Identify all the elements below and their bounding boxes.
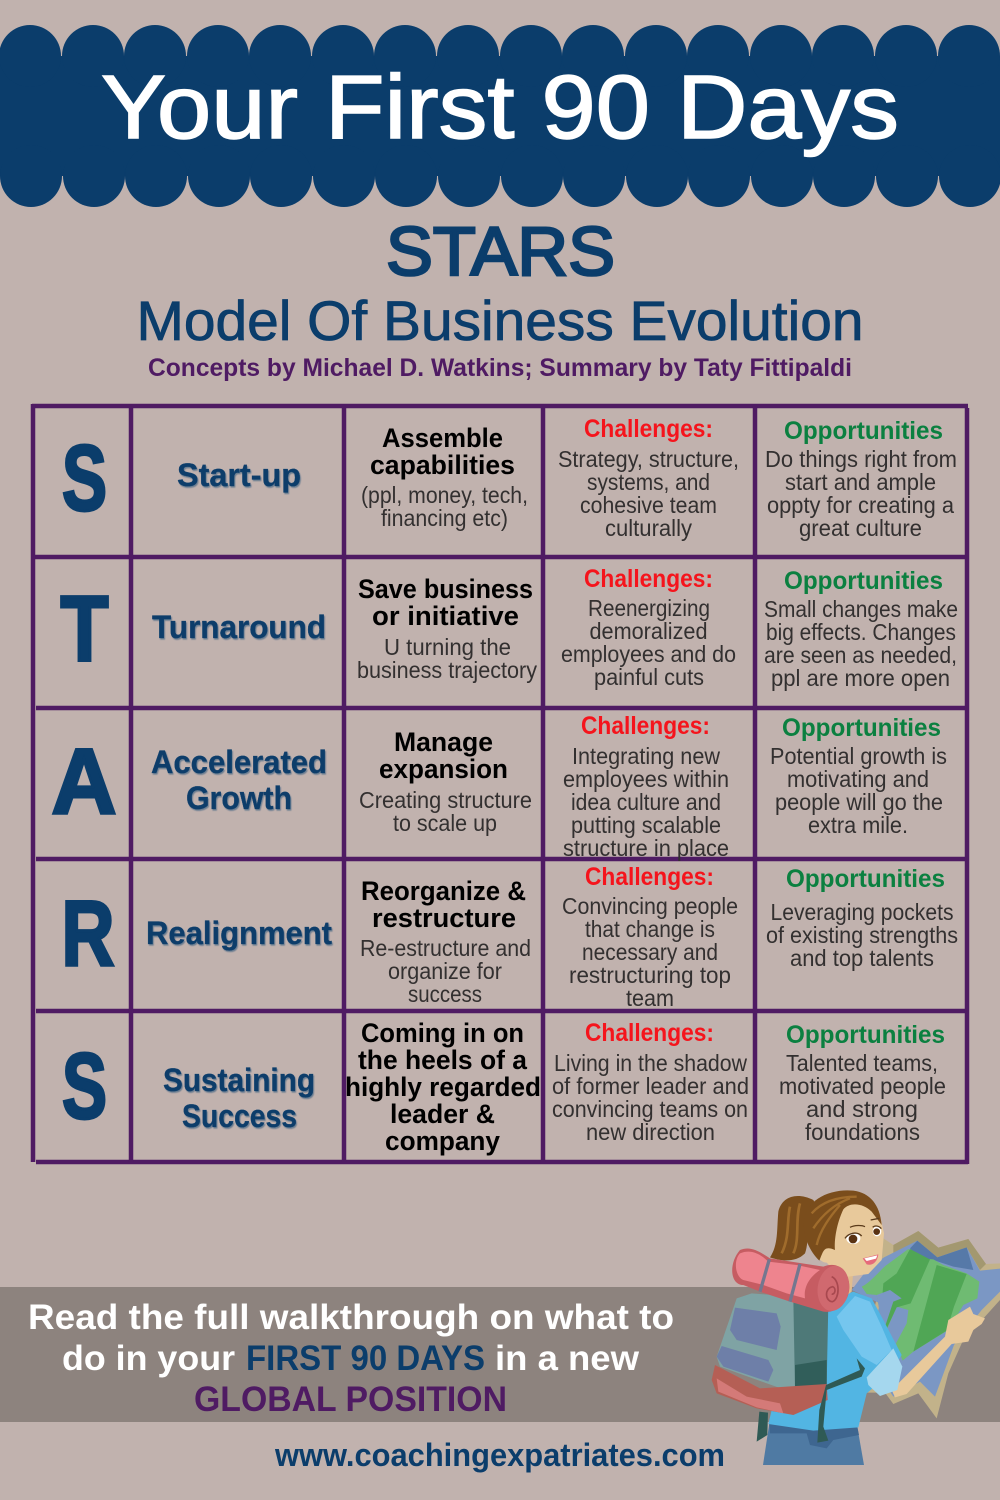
row: Turnaround: Challenges: [584, 565, 713, 593]
row: Accelerated Growth: Potential growth is [770, 743, 947, 769]
row: Realignment: Leveraging pockets [770, 899, 954, 925]
row: Realignment: Challenges: [585, 863, 714, 891]
row: Sustaining Success: Coming in on [361, 1018, 524, 1048]
row: Turnaround: Reenergizing [588, 595, 710, 621]
row: Realignment: restructuring top [569, 962, 731, 988]
neck [830, 1260, 853, 1303]
row: Sustaining Success: Talented teams, [786, 1050, 938, 1076]
head and hair [804, 1190, 884, 1277]
row: Realignment: Re-estructure and [360, 935, 531, 961]
row: Accelerated Growth: Accelerated [151, 744, 327, 780]
row: Start-up: S [62, 426, 107, 530]
title banner with scalloped edges [0, 25, 1000, 207]
row: Accelerated Growth: Integrating new [572, 743, 720, 769]
bedroll [732, 1248, 852, 1313]
row: Realignment: organize for [388, 958, 502, 984]
row: Sustaining Success: of former leader and [552, 1073, 749, 1099]
call to action text: GLOBAL POSITION [194, 1380, 507, 1419]
row: Accelerated Growth: employees within [563, 766, 729, 792]
shirt [768, 1292, 902, 1431]
call to action text: in a new [495, 1339, 640, 1378]
row: Start-up [62, 415, 957, 541]
row: Realignment: team [626, 985, 674, 1011]
row: Accelerated Growth: to scale up [393, 810, 497, 836]
call to action text: FIRST 90 DAYS [246, 1339, 485, 1378]
row: Start-up: financing etc) [381, 505, 508, 531]
row: Turnaround: demoralized [590, 618, 708, 644]
row: Turnaround: are seen as needed, [764, 642, 957, 668]
row: Accelerated Growth: people will go the [775, 789, 943, 815]
row: Realignment: that change is [585, 916, 715, 942]
row: Accelerated Growth: Challenges: [581, 712, 710, 740]
row: Start-up: (ppl, money, tech, [361, 482, 528, 508]
row: Sustaining Success: Challenges: [585, 1019, 714, 1047]
row: Sustaining Success: foundations [805, 1119, 920, 1145]
credit line: Concepts by Michael D. Watkins; Summary by Taty Fittipaldi [148, 354, 852, 382]
subheading: Model Of Business Evolution [136, 289, 864, 352]
row: Accelerated Growth: putting scalable [571, 812, 721, 838]
row: Accelerated Growth: A [52, 730, 116, 834]
row: Turnaround: U turning the [384, 634, 511, 660]
row: Realignment: Reorganize & [361, 876, 526, 906]
row: Sustaining Success: highly regarded [345, 1072, 541, 1102]
row: Start-up: cohesive team [580, 492, 717, 518]
row: Accelerated Growth: structure in place [563, 835, 729, 861]
row: Start-up: capabilities [370, 450, 515, 480]
row: Realignment: success [408, 981, 482, 1007]
website url: www.coachingexpatriates.com [274, 1437, 725, 1473]
row: Start-up: start and ample [785, 469, 936, 495]
row: Realignment: of existing strengths [766, 922, 958, 948]
row: Sustaining Success [62, 1018, 946, 1156]
row: Sustaining Success: motivated people [779, 1073, 946, 1099]
row: Realignment: R [62, 882, 114, 986]
row: Sustaining Success: leader & [390, 1099, 495, 1129]
row: Start-up: systems, and [587, 469, 710, 495]
row: Turnaround: T [60, 576, 108, 680]
row: Turnaround: employees and do [561, 641, 736, 667]
call to action text: Read the full walkthrough on what to [28, 1298, 674, 1337]
row: Turnaround [60, 565, 958, 691]
row: Realignment: Convincing people [562, 893, 738, 919]
row: Start-up: Start-up [177, 457, 301, 493]
jeans [763, 1423, 864, 1465]
row: Accelerated Growth: Opportunities [782, 714, 941, 742]
footer band [0, 1287, 1000, 1422]
row: Start-up: great culture [799, 515, 922, 541]
arm and hand [892, 1307, 985, 1397]
row: Sustaining Success: S [62, 1034, 107, 1138]
heading: STARS: STARS [386, 213, 615, 290]
call to action text: do in your [62, 1339, 235, 1378]
row: Sustaining Success: Success [182, 1098, 297, 1134]
row: Sustaining Success: new direction [586, 1119, 715, 1145]
call to action text [28, 1298, 674, 1419]
row: Turnaround: big effects. Changes [766, 619, 956, 645]
row: Accelerated Growth: Manage [394, 727, 493, 757]
table grid [32, 404, 968, 1164]
row: Accelerated Growth: motivating and [787, 766, 929, 792]
row: Turnaround: painful cuts [594, 664, 704, 690]
row: Start-up: oppty for creating a [767, 492, 954, 518]
ponytail [770, 1196, 817, 1260]
row: Turnaround: Opportunities [784, 567, 943, 595]
row: Accelerated Growth: extra mile. [808, 812, 908, 838]
row: Turnaround: business trajectory [357, 657, 537, 683]
illustration: traveller with backpack and map [712, 1190, 1000, 1465]
row: Sustaining Success: the heels of a [358, 1045, 528, 1075]
row: Accelerated Growth: Creating structure [359, 787, 532, 813]
row: Sustaining Success: convincing teams on [552, 1096, 748, 1122]
row: Realignment [62, 863, 958, 1011]
map [852, 1231, 1000, 1418]
row: Turnaround: or initiative [372, 601, 519, 631]
row: Start-up: Challenges: [584, 415, 713, 443]
row: Realignment: necessary and [582, 939, 718, 965]
row: Sustaining Success: Sustaining [163, 1062, 315, 1098]
row: Turnaround: Turnaround [152, 609, 326, 645]
title: Your First 90 Days [101, 58, 899, 158]
rolled sleeve [867, 1348, 902, 1396]
row: Realignment: Opportunities [786, 865, 945, 893]
row: Sustaining Success: company [385, 1126, 500, 1156]
row: Turnaround: Save business [358, 574, 533, 604]
row: Start-up: culturally [605, 515, 692, 541]
row: Start-up: Opportunities [784, 417, 943, 445]
row: Realignment: Realignment [146, 915, 332, 951]
row: Sustaining Success: Living in the shadow [554, 1050, 747, 1076]
row: Start-up: Strategy, structure, [558, 446, 739, 472]
row: Start-up: Do things right from [765, 446, 957, 472]
row: Start-up: Assemble [382, 423, 503, 453]
row: Sustaining Success: Opportunities [786, 1021, 945, 1049]
row: Sustaining Success: and strong [806, 1096, 918, 1122]
row: Accelerated Growth [52, 712, 947, 861]
row: Turnaround: ppl are more open [771, 665, 950, 691]
row: Turnaround: Small changes make [764, 596, 958, 622]
row: Accelerated Growth: Growth [186, 780, 292, 816]
row: Accelerated Growth: idea culture and [571, 789, 721, 815]
backpack [712, 1293, 865, 1443]
row: Realignment: restructure [372, 903, 516, 933]
row: Realignment: and top talents [790, 945, 934, 971]
row: Accelerated Growth: expansion [379, 754, 508, 784]
